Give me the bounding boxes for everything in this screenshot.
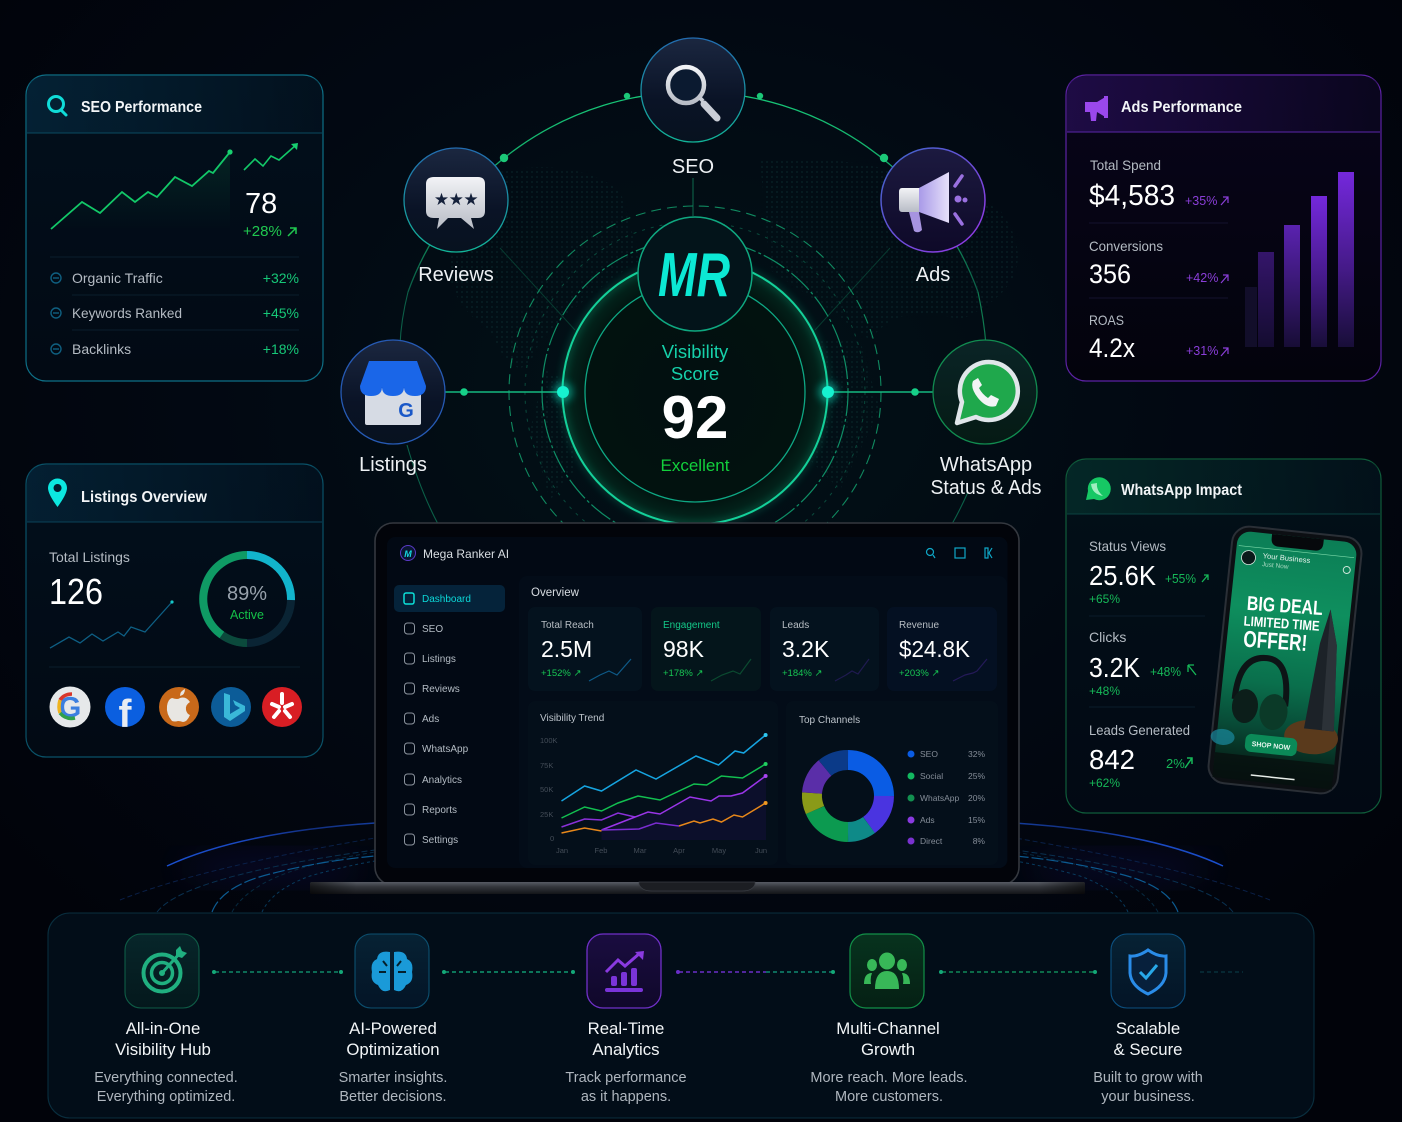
chart: Top Channels donut: WhatsApp (920, 793, 959, 803)
card: Total Reach (528, 607, 642, 691)
app header (400, 546, 992, 561)
card: Leads: Leads (782, 620, 809, 631)
row: Organic Traffic: Organic Traffic (72, 270, 163, 286)
card: Engagement: +178% ↗ (663, 668, 703, 679)
node: Ads: Ads (916, 264, 950, 286)
icon: Google (50, 686, 90, 728)
panel: SEO Performance (26, 75, 323, 381)
chart: Top Channels donut: 8% (973, 836, 985, 846)
feature: AI-Powered Optimization (339, 934, 447, 1105)
row: Organic Traffic: +32% (263, 270, 299, 286)
feature: Real-Time Analytics: Track performance (565, 1070, 687, 1086)
total listings (49, 549, 174, 648)
heading: WhatsApp Impact (1121, 482, 1242, 499)
metric: ROAS: +31% (1186, 344, 1218, 358)
card: Engagement: Engagement (663, 620, 720, 631)
row: Backlinks: Backlinks (72, 341, 131, 357)
total listings: 126 (49, 571, 103, 612)
feature: AI-Powered Optimization: Better decisions. (339, 1089, 447, 1105)
metric: Status Views: 25.6K (1089, 560, 1156, 591)
node: Reviews: ★★★ (434, 190, 478, 209)
metric: Leads Generated: 842 (1089, 744, 1135, 775)
orbit connector dots (500, 93, 888, 162)
sidebar: Ads (422, 714, 439, 725)
icon: magnifier (48, 96, 66, 115)
donut: 89% active: Active (230, 608, 264, 622)
connector endpoints (212, 970, 1097, 974)
chart: Visibility Trend: Feb (595, 846, 607, 855)
phone button: SHOP NOW (1251, 741, 1291, 752)
visibility score text: Visibility (662, 341, 729, 362)
card: Revenue: $24.8K (899, 636, 971, 662)
icon: megaphone (1085, 96, 1108, 121)
card: Total Reach: 2.5M (541, 636, 592, 662)
metric: Leads Generated: +62% (1089, 776, 1120, 790)
sidebar (394, 585, 505, 846)
node: WhatsApp: Status & Ads (930, 477, 1042, 499)
heading: SEO Performance (81, 99, 202, 116)
visibility score text: 92 (662, 384, 728, 451)
chart: Top Channels donut (786, 701, 998, 865)
icon: Bing (211, 687, 251, 727)
overview panel (519, 576, 1007, 868)
metric: 78 (243, 188, 296, 240)
floor glow (180, 854, 1210, 882)
feature: Multi-Channel Growth: Multi-Channel (836, 1019, 940, 1038)
metric: Clicks: 3.2K (1089, 652, 1140, 683)
metric: Clicks: Clicks (1089, 629, 1126, 645)
icon: whatsapp (1086, 477, 1111, 500)
feature: Real-Time Analytics (565, 934, 687, 1105)
laptop base (310, 882, 1085, 894)
donut: 89% active (203, 555, 291, 643)
phone mockup: Just Now (1261, 561, 1289, 571)
card: Leads (770, 607, 879, 691)
orbit ring connecting channels (400, 92, 986, 524)
card: Engagement: 98K (663, 636, 705, 662)
chart: Visibility Trend: 25K (540, 810, 553, 819)
card: Leads: +184% ↗ (782, 668, 822, 679)
card: Leads: 3.2K (782, 636, 830, 662)
metric: Conversions (1089, 238, 1228, 289)
chart: Visibility Trend: Jan (556, 846, 568, 855)
chart: Visibility Trend: 0 (550, 834, 554, 843)
metric: Conversions: 356 (1089, 259, 1131, 289)
card: Revenue: +203% ↗ (899, 668, 939, 679)
visibility score text: Score (671, 363, 719, 384)
floor ripples left (120, 823, 375, 912)
app header: Mega Ranker AI (423, 547, 509, 561)
feature: Scalable & Secure (1093, 934, 1203, 1105)
metric: Leads Generated (1089, 722, 1192, 790)
icon: pin (48, 478, 67, 507)
heading: Listings Overview (81, 489, 208, 506)
feature: Multi-Channel Growth: Growth (861, 1040, 915, 1059)
connector arrows (215, 971, 1243, 973)
metric: 78: 78 (245, 188, 277, 220)
phone ad text: LIMITED TIME (1243, 613, 1320, 634)
phone scenery (1210, 728, 1235, 746)
metric: ROAS (1089, 312, 1228, 363)
heading: Ads Performance (1121, 99, 1242, 116)
phone ad text: OFFER! (1243, 626, 1308, 656)
world map dots (448, 159, 1018, 500)
panel: Listings Overview (26, 464, 323, 757)
icon: Yelp (262, 687, 302, 727)
icon: Apple (159, 687, 199, 727)
node: Ads (881, 148, 985, 286)
metric: ROAS: ROAS (1089, 312, 1124, 328)
metric: ROAS: 4.2x (1089, 333, 1135, 363)
node: WhatsApp (930, 340, 1042, 499)
chart: Visibility Trend: Mar (634, 846, 647, 855)
metric: Leads Generated: 2% (1166, 756, 1185, 771)
chart: Visibility Trend: Visibility Trend (540, 713, 604, 724)
panel: WhatsApp Impact (1066, 459, 1381, 813)
metric: 78: +28% (243, 223, 282, 240)
feature: Scalable & Secure: your business. (1101, 1089, 1195, 1105)
node: Listings: G (398, 400, 414, 422)
metric: Total Spend: $4,583 (1089, 180, 1175, 212)
metric: Conversions: Conversions (1089, 238, 1163, 254)
icon: Google: G (59, 692, 81, 724)
panel: Ads Performance (1066, 75, 1381, 381)
feature: Real-Time Analytics: as it happens. (581, 1089, 671, 1105)
feature: All-in-One Visibility Hub (94, 934, 238, 1105)
metric: Conversions: +42% (1186, 271, 1218, 285)
phone ad text (1242, 593, 1323, 657)
sidebar: Reports (422, 805, 457, 816)
feature: Multi-Channel Growth: More customers. (835, 1089, 943, 1105)
sidebar: Dashboard (422, 594, 471, 605)
chart: Top Channels donut: Ads (920, 815, 935, 825)
card: Total Reach: +152% ↗ (541, 668, 581, 679)
phone mockup: Your Business (1262, 551, 1311, 565)
node: Reviews (404, 148, 508, 286)
metric: Status Views: Status Views (1089, 538, 1166, 554)
phone tower (1282, 606, 1351, 757)
chart: Visibility Trend: 100K (540, 736, 558, 745)
feature: All-in-One Visibility Hub: Everything connected. (94, 1070, 238, 1086)
metric: Clicks (1089, 629, 1196, 698)
metric: Leads Generated: Leads Generated (1089, 722, 1190, 738)
logo circle: MR (658, 241, 730, 310)
sidebar: Settings (422, 835, 458, 846)
chart: Top Channels donut: 25% (968, 771, 985, 781)
row: Backlinks (51, 341, 299, 357)
phone button (1244, 733, 1298, 757)
panel: feature strip (48, 913, 1314, 1118)
app header: M (404, 549, 412, 559)
feature: All-in-One Visibility Hub: Visibility Hub (115, 1040, 211, 1059)
metric: Total Spend: Total Spend (1090, 157, 1161, 173)
floor ripples right (1015, 823, 1270, 912)
chart: Visibility Trend: Jun (755, 846, 767, 855)
node: Reviews: Reviews (418, 264, 494, 286)
chart: Top Channels donut: Direct (920, 836, 943, 846)
phone mockup (1206, 525, 1363, 795)
metric: Status Views: +55% (1165, 572, 1196, 586)
metric: Status Views (1089, 538, 1208, 606)
feature: Scalable & Secure: Scalable (1116, 1019, 1180, 1038)
side connectors with glowing nodes (445, 382, 933, 402)
icon: Facebook: f (118, 693, 132, 736)
phone ad text: BIG DEAL (1246, 593, 1323, 620)
total listings: Total Listings (49, 549, 130, 565)
feature: Real-Time Analytics: Analytics (592, 1040, 660, 1059)
feature: Multi-Channel Growth: More reach. More leads. (810, 1070, 968, 1086)
icon: Facebook (105, 687, 145, 736)
feature: Real-Time Analytics: Real-Time (588, 1019, 664, 1038)
central visibility score rings (509, 206, 881, 578)
chart: Top Channels donut: Top Channels (799, 715, 860, 726)
feature: All-in-One Visibility Hub: Everything optimized. (97, 1089, 235, 1105)
line chart (51, 143, 298, 229)
feature: Scalable & Secure: & Secure (1113, 1040, 1183, 1059)
sidebar: Listings (422, 654, 456, 665)
feature: Scalable & Secure: Built to grow with (1093, 1070, 1203, 1086)
card: Engagement (651, 607, 761, 691)
sidebar: Analytics (422, 775, 462, 786)
card: Revenue: Revenue (899, 620, 939, 631)
feature: AI-Powered Optimization: Optimization (346, 1040, 440, 1059)
sidebar: WhatsApp (422, 744, 469, 755)
feature: AI-Powered Optimization: Smarter insights. (339, 1070, 447, 1086)
row: Keywords Ranked: +45% (263, 305, 299, 321)
feature: All-in-One Visibility Hub: All-in-One (126, 1019, 200, 1038)
chart: Top Channels donut: SEO (920, 749, 938, 759)
metric: Clicks: +48% (1150, 665, 1181, 679)
row: Backlinks: +18% (263, 341, 299, 357)
chart: Top Channels donut: Social (920, 771, 943, 781)
visibility score text (661, 341, 730, 475)
node: Listings: Listings (359, 454, 427, 476)
laptop (310, 523, 1085, 894)
metric: Total Spend: +35% (1185, 194, 1217, 208)
chart: Top Channels donut: 20% (968, 793, 985, 803)
metric: Total Spend (1089, 157, 1228, 212)
node: Listings (341, 340, 445, 476)
feature: Multi-Channel Growth (810, 934, 968, 1105)
sidebar: Reviews (422, 684, 460, 695)
chart: Visibility Trend: 50K (540, 785, 553, 794)
phone headphones (1230, 655, 1293, 731)
chart: Visibility Trend (528, 701, 778, 865)
sidebar: SEO (422, 624, 443, 635)
overview heading: Overview (531, 587, 580, 599)
row: Organic Traffic (51, 270, 299, 286)
bar chart (1245, 172, 1354, 347)
node: SEO: SEO (672, 156, 714, 178)
row: Keywords Ranked: Keywords Ranked (72, 305, 182, 321)
metric: Clicks: +48% (1089, 684, 1120, 698)
card: Total Reach: Total Reach (541, 620, 594, 631)
node: SEO (641, 38, 745, 178)
chart: Visibility Trend: 75K (540, 761, 553, 770)
logo circle (638, 217, 752, 331)
feature: AI-Powered Optimization: AI-Powered (349, 1019, 437, 1038)
chart: Top Channels donut: 15% (968, 815, 985, 825)
chart: Top Channels donut: 32% (968, 749, 985, 759)
chart: Visibility Trend: May (712, 846, 726, 855)
row: Keywords Ranked (51, 305, 299, 321)
visibility score text: Excellent (661, 456, 730, 475)
card: Revenue (887, 607, 997, 691)
donut: 89% active: 89% (227, 583, 267, 605)
node: WhatsApp: WhatsApp (940, 454, 1032, 476)
metric: Status Views: +65% (1089, 592, 1120, 606)
chart: Visibility Trend: Apr (673, 846, 685, 855)
